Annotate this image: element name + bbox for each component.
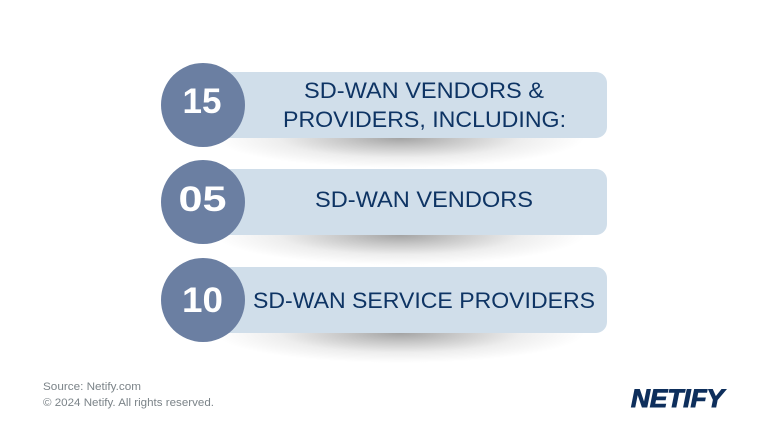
panel: 05 vendors bbox=[161, 160, 607, 265]
panel: 10 service providers bbox=[161, 258, 607, 363]
circle 3 bbox=[161, 258, 245, 342]
number 15: 15 bbox=[182, 82, 222, 121]
bar shadow 3 bbox=[215, 303, 585, 363]
bar 1 bbox=[215, 72, 607, 138]
source note bbox=[43, 381, 214, 409]
source note: © 2024 Netify. All rights reserved. bbox=[43, 397, 214, 409]
source note: Source: Netify.com bbox=[43, 381, 141, 393]
bar shadow 1 bbox=[215, 108, 585, 168]
panel: 15 vendors and providers bbox=[161, 63, 607, 168]
number 05: 05 bbox=[178, 180, 226, 219]
circle 2 bbox=[161, 160, 245, 244]
logo: NETIFY: NETIFY bbox=[631, 385, 726, 413]
label 1 bbox=[283, 78, 566, 132]
label 2: SD-WAN VENDORS bbox=[315, 187, 533, 212]
label 1: PROVIDERS, INCLUDING: bbox=[283, 107, 566, 132]
bar 3 bbox=[215, 267, 607, 333]
label 3: SD-WAN SERVICE PROVIDERS bbox=[253, 288, 595, 313]
bar shadow 2 bbox=[215, 205, 585, 265]
circle 1 bbox=[161, 63, 245, 147]
label 1: SD-WAN VENDORS & bbox=[304, 78, 544, 103]
number 10: 10 bbox=[182, 281, 223, 320]
bar 2 bbox=[215, 169, 607, 235]
